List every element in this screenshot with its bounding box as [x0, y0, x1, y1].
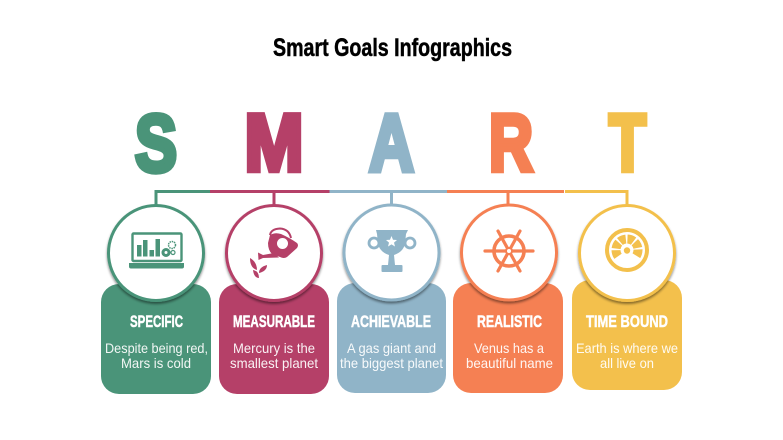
text: time bound: [576, 340, 678, 371]
title: Smart Goals Infographics: [273, 34, 512, 62]
text: realistic: [466, 340, 553, 371]
card: measurable: [219, 284, 329, 394]
heading: specific: SPECIFIC: [130, 312, 183, 331]
heading: realistic: REALISTIC: [477, 312, 542, 331]
letter A: A: [369, 98, 414, 188]
letter T: T: [609, 98, 646, 188]
text: specific: Despite being red,: [105, 340, 208, 356]
card: specific: [101, 284, 211, 394]
circle: measurable: [226, 206, 322, 300]
text: measurable: smallest planet: [230, 355, 318, 371]
circle: time bound: [580, 206, 674, 300]
connector lines: [156, 192, 627, 206]
letter R: R: [489, 98, 533, 188]
circle: specific: [108, 206, 204, 300]
big letters: SMART: [135, 98, 646, 189]
letter S: S: [135, 99, 177, 189]
text: measurable: Mercury is the: [233, 340, 315, 356]
text: specific: Mars is cold: [121, 355, 191, 371]
text: specific: [105, 340, 208, 371]
icon: citrus gauge: [607, 230, 647, 270]
card: achievable: [337, 283, 446, 393]
text: achievable: the biggest planet: [340, 355, 443, 371]
heading: measurable: MEASURABLE: [233, 312, 315, 331]
text: measurable: [230, 340, 318, 371]
circle: achievable: [344, 205, 439, 300]
icon: ship wheel: [485, 231, 533, 271]
text: achievable: A gas giant and: [347, 340, 436, 356]
text: time bound: all live on: [600, 355, 654, 371]
icon: laptop with chart and gears: [129, 234, 184, 268]
icon: trophy with star: [369, 230, 415, 272]
heading: achievable: ACHIEVABLE: [351, 312, 431, 331]
letter M: M: [244, 98, 304, 188]
card: time bound: [572, 280, 682, 390]
text: achievable: [340, 340, 443, 371]
text: time bound: Earth is where we: [576, 340, 678, 356]
circle: realistic: [462, 205, 556, 300]
card: realistic: [453, 283, 563, 393]
text: realistic: beautiful name: [466, 355, 553, 371]
text: realistic: Venus has a: [474, 340, 544, 356]
heading: time bound: TIME BOUND: [586, 312, 668, 331]
icon: watering can with plant: [250, 228, 298, 278]
